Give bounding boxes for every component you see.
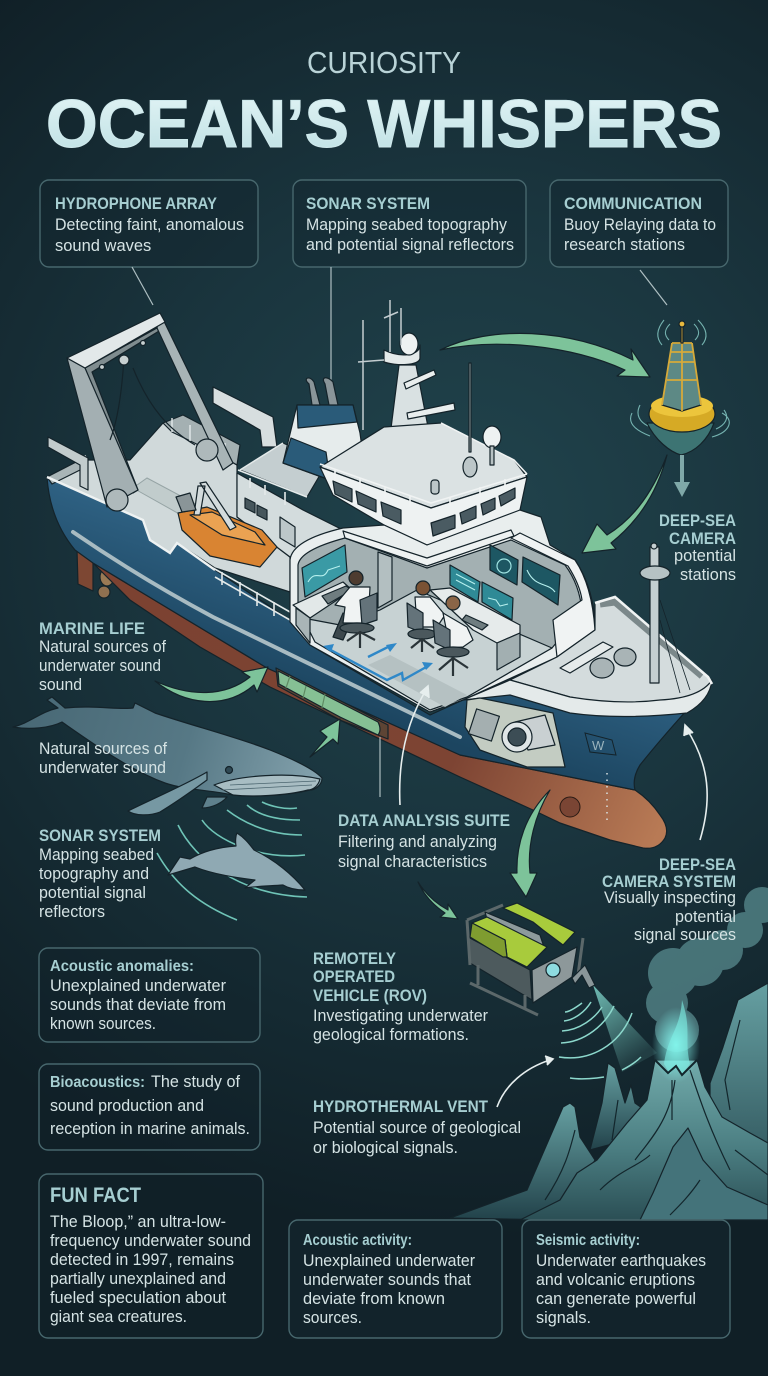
whale label: underwater sound <box>39 759 166 777</box>
ROV label: geological formations. <box>313 1026 469 1044</box>
dolphin <box>168 833 305 890</box>
hydrothermal vent label: HYDROTHERMAL VENT <box>313 1097 489 1116</box>
volcano cone <box>520 1060 768 1220</box>
roof rail <box>320 423 527 507</box>
A-frame <box>67 313 233 511</box>
aft rail posts <box>172 418 225 458</box>
main mast <box>358 300 455 473</box>
buoy ripples <box>631 320 729 437</box>
deckhouse <box>237 443 343 557</box>
sound waves <box>157 802 307 920</box>
deep-sea camera label: potential <box>674 547 736 565</box>
panel: fun fact: partially unexplained and <box>50 1270 226 1288</box>
monitors <box>302 545 560 620</box>
hydrothermal vent label: or biological signals. <box>313 1139 458 1157</box>
deep-sea camera label <box>659 511 736 584</box>
ROV label: REMOTELY <box>313 949 397 968</box>
data analysis suite label: DATA ANALYSIS SUITE <box>338 811 510 830</box>
arrow: marine life to hull <box>155 667 268 702</box>
fore mast <box>640 543 670 683</box>
title: CURIOSITY <box>307 45 461 80</box>
deep-sea camera label: CAMERA <box>669 529 736 548</box>
marine life label: sound <box>39 676 82 694</box>
buoy down arrow <box>674 455 690 497</box>
panel: fun fact: FUN FACT <box>50 1184 141 1207</box>
ROV frame and body <box>467 905 583 1015</box>
panel: communication: COMMUNICATION <box>564 194 702 213</box>
arrow: ship to buoy <box>440 333 650 377</box>
room walls <box>298 538 582 708</box>
panel: acoustic activity: Acoustic activity: <box>303 1232 412 1249</box>
panel: acoustic anomalies: known sources. <box>50 1015 156 1033</box>
hull stripe <box>73 532 460 737</box>
desks <box>293 582 520 670</box>
ROV camera and arm <box>546 963 595 988</box>
panel: acoustic activity <box>289 1220 502 1338</box>
deep-sea camera label: DEEP-SEA <box>659 511 736 530</box>
panel: bioacoustics: reception in marine animals. <box>50 1120 250 1138</box>
hydrothermal vent label: Potential source of geological <box>313 1119 521 1137</box>
hydrothermal vent label <box>313 1097 521 1157</box>
panel: acoustic activity: underwater sounds that <box>303 1271 471 1289</box>
panel: seismic activity: Seismic activity: <box>536 1232 640 1249</box>
deep-sea camera system label: signal sources <box>634 926 736 944</box>
data analysis suite label <box>338 811 510 871</box>
panel: bioacoustics: Bioacoustics: <box>50 1074 145 1091</box>
deep-sea camera system label <box>602 855 736 944</box>
rudder and propeller <box>77 550 114 598</box>
panel: sonar system: Mapping seabed topography <box>306 216 508 234</box>
hull logo: W <box>592 738 605 753</box>
panel: acoustic anomalies <box>39 948 260 1042</box>
room door <box>378 552 392 608</box>
ROV label: Investigating underwater <box>313 1007 488 1025</box>
scientist 1 <box>333 613 352 640</box>
buoy tower <box>662 321 701 411</box>
winch <box>213 387 277 447</box>
panel: hydrophone array <box>40 180 258 267</box>
foredeck <box>463 597 712 716</box>
panel: acoustic anomalies: Acoustic anomalies: <box>50 958 194 975</box>
deep-sea camera system label: Visually inspecting <box>604 889 736 907</box>
arrow: buoy to ship <box>582 455 667 553</box>
scientist 3 <box>443 613 473 648</box>
panel: hydrophone array: HYDROPHONE ARRAY <box>55 194 218 213</box>
bridge <box>320 423 527 545</box>
deep-sea camera system label: CAMERA SYSTEM <box>602 872 736 891</box>
sonar system label: topography and <box>39 865 149 883</box>
panel: fun fact: detected in 1997, remains <box>50 1251 234 1269</box>
side rail <box>213 568 290 620</box>
hull logo <box>560 733 616 820</box>
panel: acoustic activity: Unexplained underwater <box>303 1252 475 1270</box>
light beam <box>593 985 657 1072</box>
crane arm <box>48 437 88 490</box>
deep-sea camera system label: DEEP-SEA <box>659 855 736 874</box>
aft deck <box>47 423 290 592</box>
panel: sonar system: and potential signal reflectors <box>306 236 514 254</box>
panel: acoustic anomalies: sounds that deviate from <box>50 996 226 1014</box>
title <box>46 45 722 162</box>
whale <box>13 697 322 815</box>
foredeck equipment <box>560 642 636 678</box>
marine life label <box>39 619 166 694</box>
panel: communication: Buoy Relaying data to <box>564 216 716 234</box>
hull: blue upper <box>47 477 687 790</box>
bow bulwark <box>600 602 702 676</box>
title: OCEAN’S WHISPERS <box>46 86 722 162</box>
far right rock <box>710 983 768 1220</box>
whale label <box>39 740 167 777</box>
aft bulwark <box>47 415 240 484</box>
panel: acoustic activity: deviate from known <box>303 1290 445 1308</box>
panel: fun fact <box>39 1174 263 1338</box>
ROV label: VEHICLE (ROV) <box>313 986 427 1005</box>
inner peak <box>640 1128 768 1220</box>
panel: seismic activity: and volcanic eruptions <box>536 1271 695 1289</box>
ROV floats <box>470 903 575 967</box>
panel: sonar system <box>293 180 526 267</box>
sonar system label: SONAR SYSTEM <box>39 826 161 845</box>
sonar system label: Mapping seabed <box>39 846 154 864</box>
buoy <box>631 320 729 497</box>
sonar system label: reflectors <box>39 903 105 921</box>
panel: bioacoustics: The study of <box>151 1073 240 1091</box>
panel: acoustic anomalies: Unexplained underwater <box>50 977 226 995</box>
bridge ledge <box>343 530 514 566</box>
panel: fun fact: giant sea creatures. <box>50 1308 187 1326</box>
funnel <box>283 378 365 480</box>
panel: fun fact: frequency underwater sound <box>50 1232 251 1250</box>
hull: red lower <box>93 563 667 848</box>
marine life label: underwater sound <box>39 657 161 675</box>
panel: acoustic activity: sources. <box>303 1309 362 1327</box>
research ship <box>47 300 712 848</box>
panel: seismic activity: can generate powerful <box>536 1290 696 1308</box>
arrow: data analysis to ROV <box>418 882 458 919</box>
sonar system label <box>39 826 161 921</box>
hydrophone tube <box>276 668 388 739</box>
ROV label <box>313 949 488 1044</box>
panel: fun fact: The Bloop,” an ultra-low- <box>50 1213 226 1231</box>
ROV sonar arcs <box>559 1002 641 1079</box>
deck hatch <box>133 478 207 520</box>
ROV label: OPERATED <box>313 967 395 986</box>
scientists <box>333 571 473 676</box>
panel: seismic activity: signals. <box>536 1309 591 1327</box>
panel: fun fact: fueled speculation about <box>50 1289 226 1307</box>
superstructure white shell <box>290 510 595 712</box>
camera bay <box>465 698 565 767</box>
floor patch <box>368 655 467 707</box>
ridge lines <box>545 1020 768 1215</box>
room floor <box>303 590 552 710</box>
scientist 2 <box>415 597 445 627</box>
ROV <box>467 903 657 1079</box>
panel: seismic activity <box>522 1220 730 1338</box>
vent glow <box>652 1007 700 1083</box>
spire middle <box>590 1063 642 1150</box>
panel: hydrophone array: sound waves <box>55 237 151 255</box>
deep-sea camera system label: potential <box>675 908 736 926</box>
marine life label: Natural sources of <box>39 638 166 656</box>
smoke plume <box>646 887 768 1052</box>
panel: seismic activity: Underwater earthquakes <box>536 1252 706 1270</box>
panel: communication <box>550 180 728 267</box>
right bulkhead <box>511 533 595 657</box>
data analysis suite label: signal characteristics <box>338 853 487 871</box>
panel: communication: research stations <box>564 236 685 254</box>
deep-sea camera label: stations <box>680 566 736 584</box>
floor signal arrows <box>323 643 433 680</box>
panel: sonar system: SONAR SYSTEM <box>306 194 430 213</box>
panel: bioacoustics: sound production and <box>50 1097 204 1115</box>
thin white arrows <box>380 686 707 1107</box>
control room <box>298 530 582 710</box>
arrow: whale to hull <box>310 719 340 757</box>
arrow: hull to ROV <box>510 790 550 897</box>
spire left <box>450 1103 595 1220</box>
mountains and hydrothermal vent <box>450 887 768 1220</box>
sonar system label: potential signal <box>39 884 146 902</box>
marine life label: MARINE LIFE <box>39 619 145 638</box>
orange boat <box>176 482 277 567</box>
buoy float <box>647 423 714 455</box>
panel: bioacoustics <box>39 1064 260 1150</box>
data analysis suite label: Filtering and analyzing <box>338 833 497 851</box>
panel: hydrophone array: Detecting faint, anomalous <box>55 216 244 234</box>
roof equipment <box>431 363 501 494</box>
whale label: Natural sources of <box>39 740 167 758</box>
leader lines <box>132 267 667 455</box>
